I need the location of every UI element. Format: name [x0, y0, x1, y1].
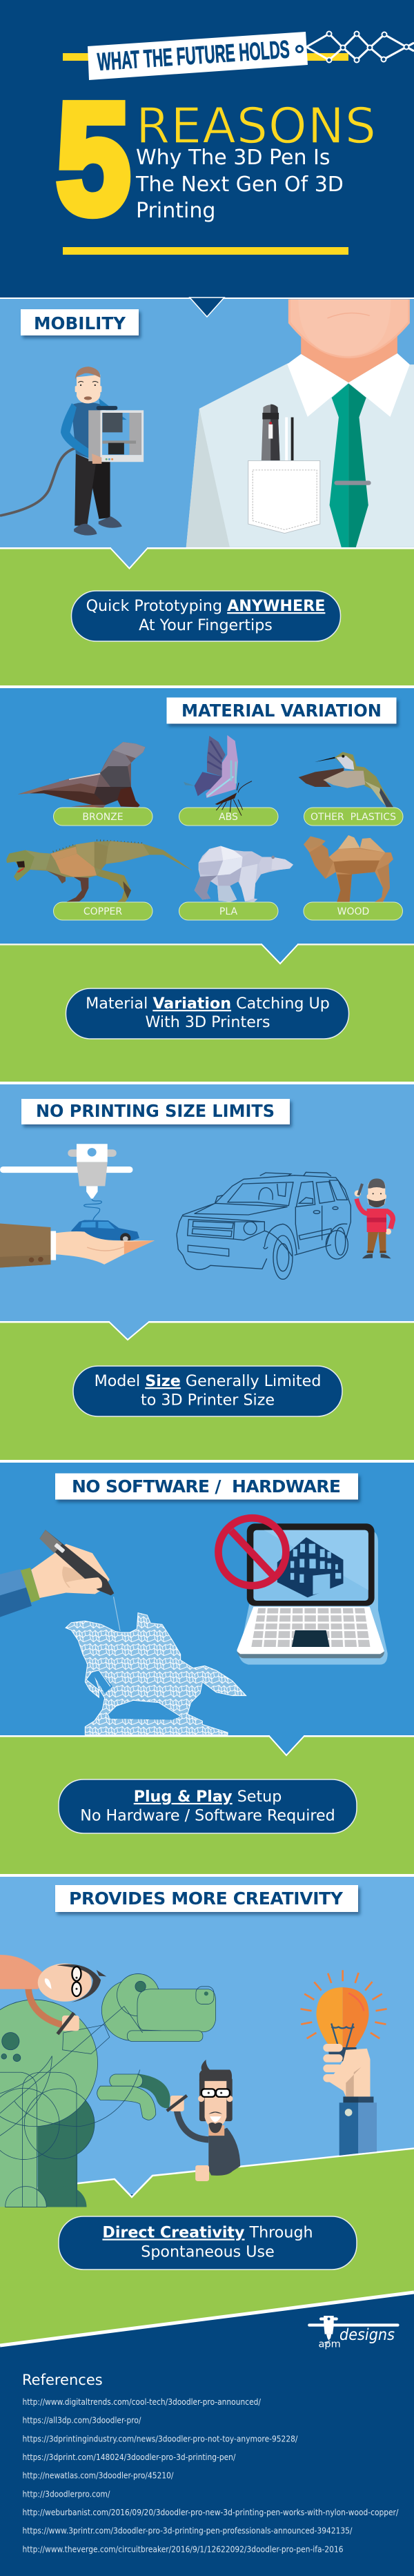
references list: http://www.theverge.com/circuitbreaker/2016/9/1/12622092/3doodler-pro-pen-ifa-2016	[22, 2544, 344, 2554]
label: material variation	[167, 697, 396, 723]
callout pill	[59, 2216, 357, 2270]
label: no software / hardware	[55, 1473, 358, 1499]
references heading: References	[22, 2372, 103, 2388]
notch	[262, 944, 298, 964]
material pills	[54, 808, 403, 920]
notch	[269, 1736, 304, 1755]
low-poly hummingbird	[299, 752, 393, 807]
references list: https://3dprintingindustry.com/news/3doodler-pro-not-toy-anymore-95228/	[22, 2434, 298, 2443]
notch	[109, 1322, 149, 1340]
logo: apm designs: apm	[319, 2339, 341, 2350]
bottom slope band	[0, 2292, 414, 2576]
pill: pla: PLA	[219, 906, 237, 917]
label: no printing size limits: NO PRINTING SIZE LIMITS	[36, 1101, 275, 1121]
callout pill	[72, 591, 341, 641]
illustration: bearded man holding key	[355, 1178, 393, 1258]
logo: apm designs: designs	[339, 2326, 395, 2344]
callout pill: With 3D Printers	[145, 1013, 270, 1031]
references list: https://www.3printr.com/3doodler-pro-3d-printing-pen-professionals-announced-3942135/	[22, 2526, 353, 2536]
references list	[22, 2397, 399, 2554]
illustration: man in suit with pen in pocket	[186, 300, 414, 547]
subtitle: The Next Gen Of 3D	[135, 173, 344, 197]
panel: size takeaway	[0, 1320, 414, 1463]
label: provides more creativity	[55, 1885, 358, 1912]
big number 5: 5	[57, 71, 130, 246]
label: provides more creativity: PROVIDES MORE CREATIVITY	[69, 1889, 344, 1909]
illustration: hand drawing with 3D pen	[0, 1530, 120, 1631]
yellow bar under title	[63, 247, 348, 255]
illustration: man carrying 3D printer	[0, 367, 144, 536]
illustration: laptop with crossed-out building	[218, 1518, 388, 1665]
subtitle	[135, 146, 344, 223]
panel: material variation	[0, 688, 414, 944]
header notch	[190, 297, 224, 317]
callout pill: Spontaneous Use	[141, 2243, 275, 2261]
panel: mobility takeaway	[0, 546, 414, 688]
decorative yellow bar behind banner	[63, 53, 348, 61]
callout pill: Quick Prototyping ANYWHERE	[86, 597, 325, 615]
references list: https://all3dp.com/3doodler-pro/	[22, 2416, 141, 2426]
pill: wood	[304, 902, 403, 920]
callout pill: No Hardware / Software Required	[80, 1807, 335, 1825]
callout pill: Plug & Play Setup	[134, 1788, 282, 1806]
pill: copper	[54, 902, 152, 920]
pill: bronze: BRONZE	[82, 812, 124, 823]
callout pill: to 3D Printer Size	[141, 1392, 275, 1409]
panel: material takeaway	[0, 942, 414, 1084]
panel: provides more creativity	[0, 1877, 414, 2576]
title: reasons: REASONS	[136, 97, 376, 155]
label: no software / hardware: NO SOFTWARE / HARDWARE	[72, 1476, 341, 1496]
slope and green ground	[0, 2148, 414, 2345]
callout pill	[59, 1779, 357, 1833]
label: material variation: MATERIAL VARIATION	[181, 701, 382, 721]
pill: other plastics	[304, 808, 403, 826]
subtitle: Why The 3D Pen Is	[136, 146, 331, 170]
callout pill: Model Size Generally Limited	[95, 1372, 321, 1390]
panel: mobility	[0, 297, 414, 548]
panel: hardware takeaway	[0, 1734, 414, 1877]
low-poly polar bear	[195, 846, 293, 902]
chain link ornament	[306, 32, 414, 62]
pill: bronze	[54, 808, 152, 826]
logo: apm designs	[308, 2316, 400, 2350]
pill: abs	[179, 808, 278, 826]
header panel	[57, 32, 414, 255]
subtitle: Printing	[136, 199, 215, 223]
pill: wood: WOOD	[337, 906, 369, 917]
label: mobility	[21, 309, 139, 335]
illustration: hand holding lightbulb	[300, 1970, 387, 2156]
illustration: full size SUV outline	[177, 1172, 351, 1279]
illustration: dinosaur being drawn	[0, 1974, 216, 2207]
panel: no software / hardware	[0, 1463, 414, 1736]
references list: http://3doodlerpro.com/	[22, 2489, 110, 2499]
callout pill: Material Variation Catching Up	[86, 995, 330, 1013]
low-poly butterfly	[184, 735, 252, 816]
pill: copper: COPPER	[83, 906, 122, 917]
illustration: 3D drawn horse statue	[66, 1613, 246, 1735]
notch	[110, 548, 148, 569]
pill: other plastics: OTHER PLASTICS	[310, 812, 396, 823]
label: mobility: MOBILITY	[34, 313, 126, 333]
references list: https://3dprint.com/148024/3doodler-pro-3d-printing-pen/	[22, 2452, 236, 2462]
pill: abs: ABS	[219, 812, 238, 823]
references list: http://www.digitaltrends.com/cool-tech/3doodler-pro-announced/	[22, 2397, 262, 2407]
pill: pla	[179, 902, 278, 920]
banner: what the future holds	[88, 32, 308, 80]
low-poly seal	[18, 742, 146, 808]
callout pill: At Your Fingertips	[139, 616, 273, 634]
references list: http://newatlas.com/3doodler-pro/45210/	[22, 2471, 174, 2481]
illustration: print head printing small car on hand	[0, 1144, 155, 1268]
low-poly camel	[304, 835, 393, 902]
callout pill	[66, 988, 349, 1039]
illustration: person with glasses on top of dinosaur	[0, 1955, 106, 2034]
callout pill: Direct Creativity Through	[102, 2224, 313, 2242]
illustration: bearded person with pen	[167, 2060, 240, 2181]
panel: no printing size limits	[0, 1084, 414, 1322]
callout pill	[73, 1366, 342, 1416]
low-poly t-rex	[6, 840, 192, 902]
